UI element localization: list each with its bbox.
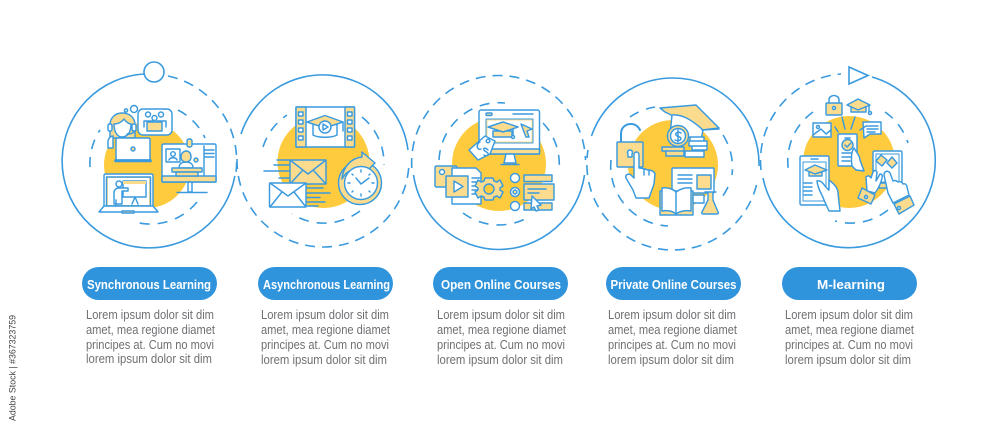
- icon: video, mail and clock: [264, 107, 382, 207]
- text block: column 2: lorem ipsum dolor sit dim: [261, 353, 387, 367]
- pill heading: Asynchronous Learning: Asynchronous Learning: [263, 277, 390, 292]
- text block: column 1: [86, 308, 215, 366]
- text block: column 2: [261, 308, 390, 367]
- pill heading: Private Online Courses: [606, 267, 741, 300]
- pill heading: Synchronous Learning: Synchronous Learning: [87, 277, 211, 292]
- text block: column 3: lorem ipsum dolor sit dim: [437, 353, 563, 367]
- yellow disc: [104, 122, 190, 208]
- outer ring with marker: [62, 62, 237, 248]
- icon: mobile learning: [800, 96, 914, 214]
- text block: column 3: Lorem ipsum dolor sit dim: [437, 308, 565, 322]
- text block: column 2: Lorem ipsum dolor sit dim: [261, 308, 389, 322]
- pill heading: M-learning: M-learning: [817, 277, 885, 292]
- pill heading: Open Online Courses: Open Online Courses: [441, 277, 561, 292]
- text block: column 2: principes at. Cum no movi: [261, 338, 389, 352]
- inner dashed ring: [788, 112, 908, 223]
- pill heading: Private Online Courses: Private Online Courses: [610, 277, 736, 292]
- text block: column 3: [437, 308, 566, 367]
- panel: open online courses: [412, 76, 586, 250]
- pill heading: Synchronous Learning: [82, 267, 217, 300]
- text block: column 5: principes at. Cum no movi: [785, 338, 913, 352]
- text block: column 3: amet, mea regione diamet: [437, 323, 566, 337]
- inner dashed ring: [439, 103, 559, 225]
- text block: column 4: principes at. Cum no movi: [608, 338, 736, 352]
- text block: column 1: principes at. Cum no movi: [86, 338, 214, 352]
- panel: m-learning: [761, 67, 935, 248]
- text block: column 1: Lorem ipsum dolor sit dim: [86, 308, 214, 322]
- text block: column 5: amet, mea regione diamet: [785, 323, 914, 337]
- yellow disc: [803, 116, 895, 208]
- text block: column 1: amet, mea regione diamet: [86, 323, 215, 337]
- inner dashed ring: [90, 110, 205, 224]
- outer ring: [587, 78, 759, 250]
- outer ring: [412, 76, 586, 250]
- icon: course monitor, media and options: [435, 110, 554, 211]
- pill heading: Open Online Courses: [433, 267, 568, 300]
- outer ring with play marker: [761, 67, 935, 248]
- pill heading: M-learning: [782, 267, 917, 300]
- side credit: Adobe Stock | #367323759: [8, 315, 18, 421]
- icon: lock, paid cap and study materials: [617, 105, 719, 215]
- text block: column 5: Lorem ipsum dolor sit dim: [785, 308, 913, 322]
- text block: column 3: principes at. Cum no movi: [437, 338, 565, 352]
- panel: asynchronous learning: [237, 75, 409, 247]
- panel: synchronous learning: [62, 62, 237, 248]
- yellow disc: [628, 120, 718, 210]
- text block: column 2: amet, mea regione diamet: [261, 323, 390, 337]
- text block: column 4: Lorem ipsum dolor sit dim: [608, 308, 736, 322]
- pill heading: Asynchronous Learning: [258, 267, 393, 300]
- text block: column 4: lorem ipsum dolor sit dim: [608, 353, 734, 367]
- text block: column 4: amet, mea regione diamet: [608, 323, 737, 337]
- outer ring: [237, 75, 409, 247]
- text block: column 4: [608, 308, 737, 367]
- text block: column 5: [785, 308, 914, 367]
- inner dashed ring: [611, 107, 732, 226]
- panel: private online courses: [587, 78, 759, 250]
- yellow disc: [452, 117, 546, 211]
- text block: column 1: lorem ipsum dolor sit dim: [86, 352, 212, 366]
- text block: column 5: lorem ipsum dolor sit dim: [785, 353, 911, 367]
- yellow disc: [278, 116, 370, 208]
- inner dashed ring: [263, 115, 384, 223]
- icon: online class devices: [99, 106, 216, 213]
